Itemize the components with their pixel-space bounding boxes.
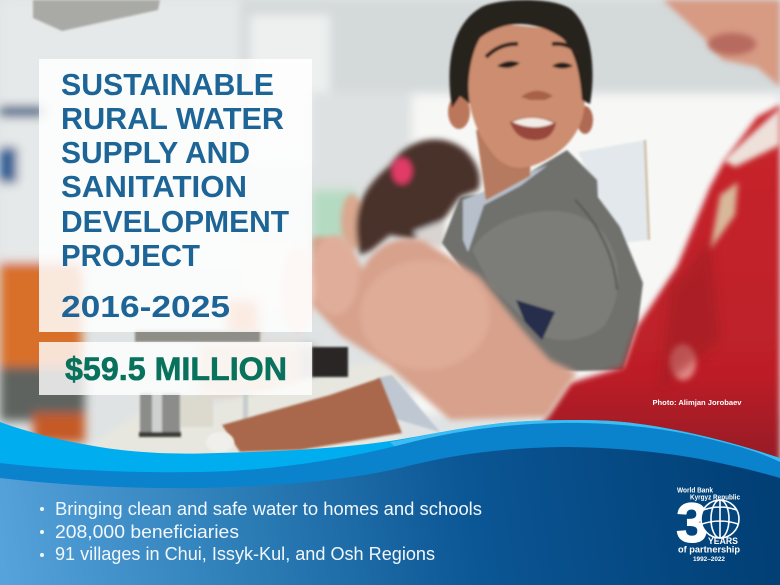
bullet 1: Bringing clean and safe water to homes and schools bbox=[55, 499, 482, 519]
heading: RURAL WATER bbox=[61, 101, 284, 136]
heading bbox=[61, 67, 289, 273]
heading: SUPPLY AND bbox=[61, 135, 250, 170]
red sweater bbox=[540, 105, 780, 480]
logo: World Bank 30 years of partnership: YEARS bbox=[708, 536, 738, 546]
logo: World Bank 30 years of partnership: Kyrgyz Republic bbox=[690, 494, 740, 502]
top right child's face bbox=[663, 0, 780, 87]
funding panel: $59.5 MILLION bbox=[65, 351, 287, 387]
funding panel bbox=[39, 342, 312, 395]
foreground hands bbox=[282, 235, 577, 420]
wave banner bbox=[0, 420, 780, 585]
logo: World Bank 30 years of partnership: World Bank bbox=[677, 488, 713, 494]
heading: PROJECT bbox=[61, 238, 200, 273]
heading: DEVELOPMENT bbox=[61, 204, 289, 239]
icon: globe bbox=[701, 500, 739, 538]
heading: SUSTAINABLE bbox=[61, 67, 274, 102]
bullet 3: 91 villages in Chui, Issyk-Kul, and Osh Regions bbox=[55, 544, 435, 564]
logo: World Bank 30 years of partnership: 1992–2022 bbox=[693, 556, 725, 563]
girl bbox=[341, 139, 480, 255]
washing arms bbox=[206, 375, 440, 452]
dispenser bbox=[33, 0, 160, 31]
photo credit: Photo: Alimjan Jorobaev bbox=[652, 398, 742, 407]
bullet 2: 208,000 beneficiaries bbox=[55, 522, 239, 542]
sink bbox=[90, 360, 400, 470]
logo: World Bank 30 years of partnership: 3 bbox=[676, 491, 708, 554]
boy's head bbox=[448, 0, 593, 200]
project years: 2016-2025 bbox=[61, 289, 230, 324]
bullet list bbox=[40, 499, 482, 564]
heading: SANITATION bbox=[61, 169, 247, 204]
faucet bbox=[135, 330, 348, 437]
title panel bbox=[39, 59, 312, 332]
logo: World Bank 30 years of partnership bbox=[676, 488, 741, 563]
picture on wall bbox=[578, 140, 649, 243]
boy's sweater bbox=[442, 150, 643, 372]
logo: World Bank 30 years of partnership: of partnership bbox=[678, 544, 741, 554]
